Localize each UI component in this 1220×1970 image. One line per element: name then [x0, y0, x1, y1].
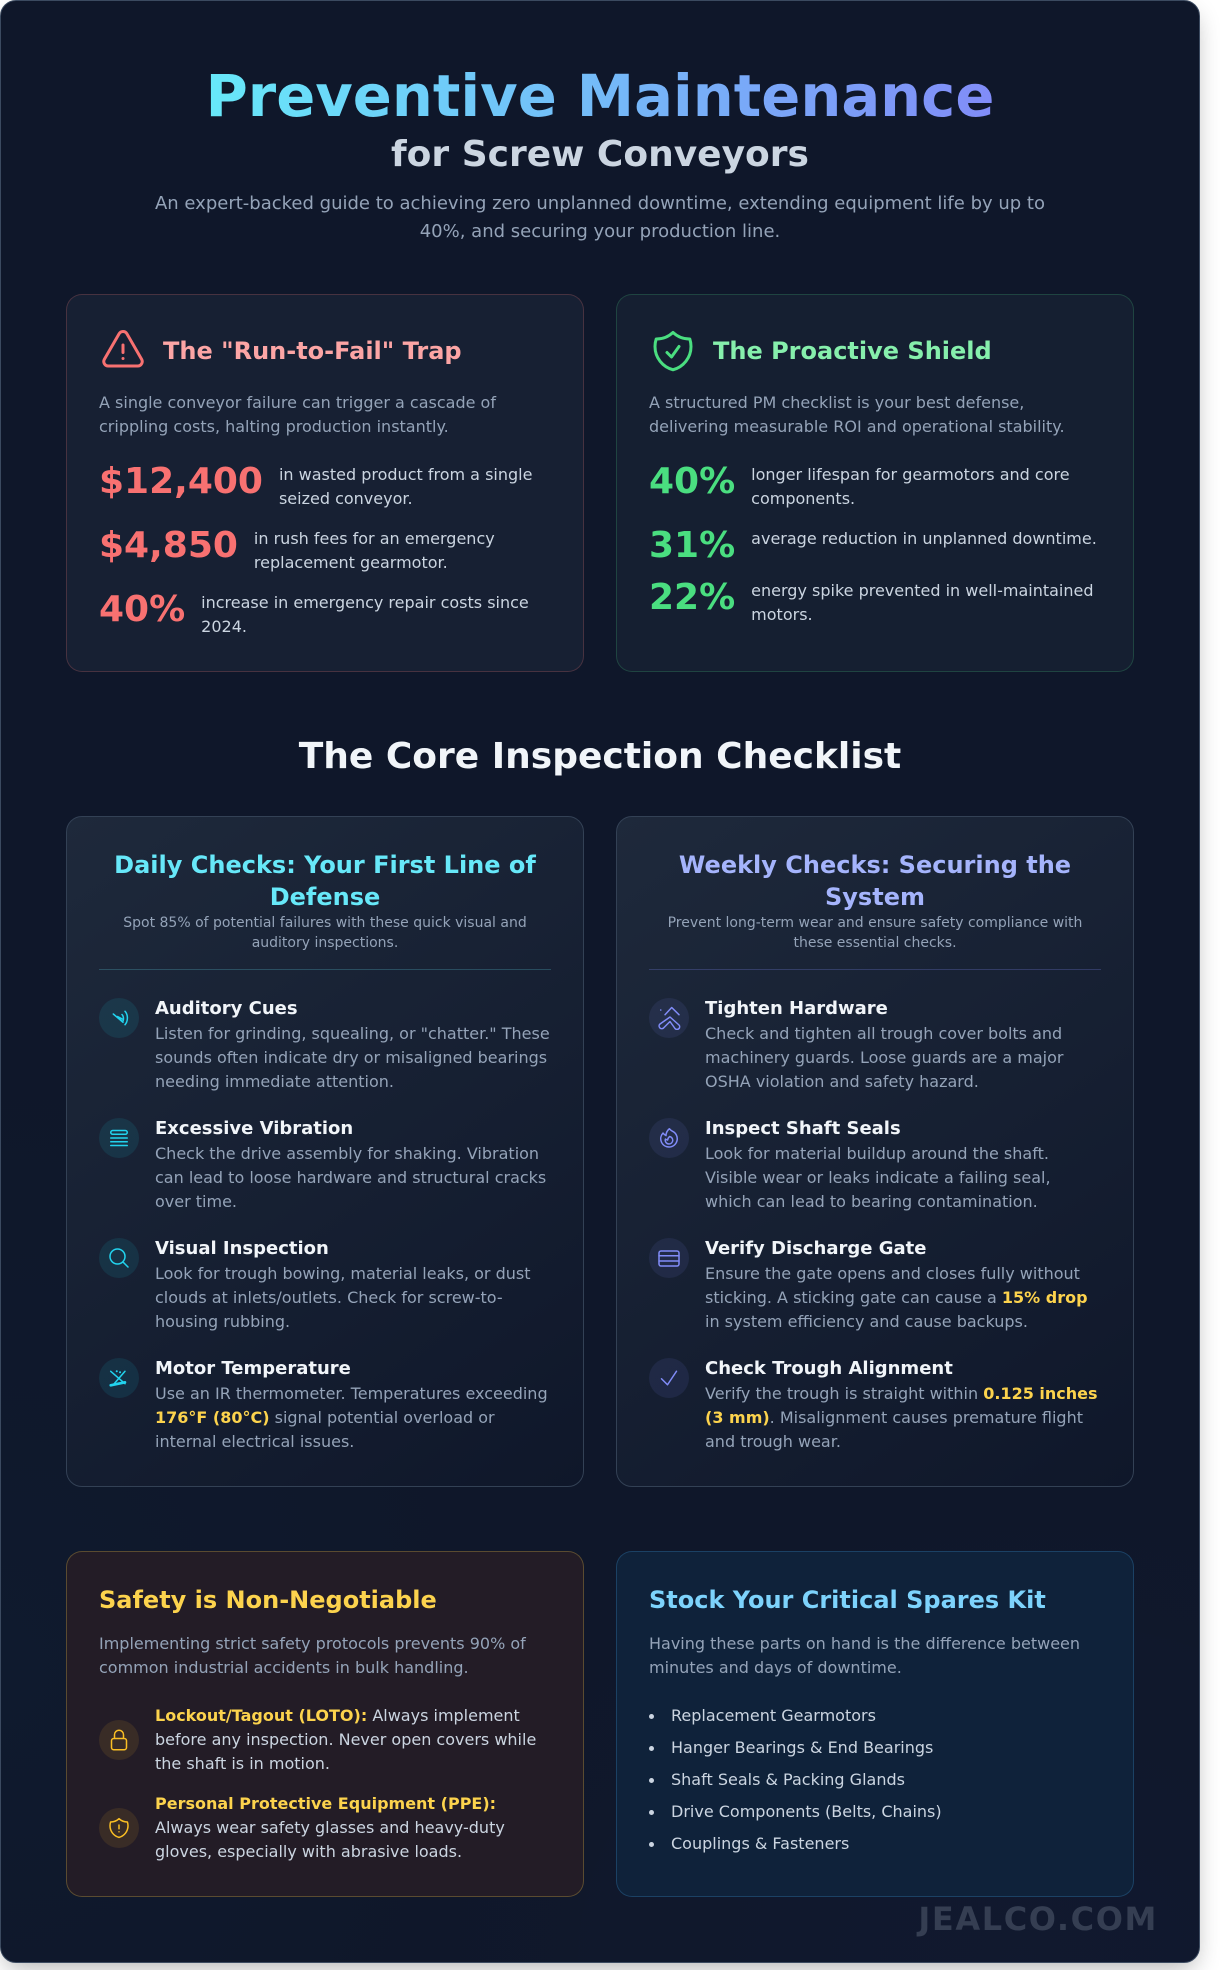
icon: wrench [649, 998, 689, 1038]
check: shaft seals [649, 1118, 1051, 1211]
daily header [99, 849, 551, 970]
check: shaft seals: Inspect Shaft Seals [705, 1118, 901, 1139]
spares list: Hanger Bearings & End Bearings [671, 1738, 933, 1757]
stat: energy: energy spike prevented in well-maintained motors. [751, 581, 1094, 624]
weekly header [649, 849, 1101, 970]
check: vibration [99, 1118, 546, 1211]
stat: downtime [649, 525, 1097, 566]
stat: downtime: 31% [649, 525, 735, 566]
check: motor temperature [99, 1358, 548, 1451]
stat: rush fees: $4,850 [99, 525, 238, 566]
stat: wasted product [99, 461, 532, 508]
icon: magnifier [99, 1238, 139, 1278]
heading: spares: Stock Your Critical Spares Kit [649, 1586, 1046, 1614]
text: spares intro: Having these parts on hand is the difference between minutes and days of downtime. [649, 1634, 1080, 1677]
icon: lock [99, 1720, 139, 1760]
heading: proactive shield: The Proactive Shield [713, 337, 992, 365]
stat: lifespan: longer lifespan for gearmotors and core components. [751, 465, 1070, 508]
icon: shield check [654, 330, 692, 372]
icon: tools [99, 1358, 139, 1398]
spares list [649, 1706, 942, 1853]
check: trough alignment: Verify the trough is straight within 0.125 inches (3 mm). Misalignment causes premature flight and trough wear. [705, 1384, 1098, 1451]
panel: safety [66, 1551, 584, 1897]
stat: lifespan [649, 461, 1070, 508]
check: vibration: Excessive Vibration [155, 1118, 353, 1139]
icon: shield alert [99, 1808, 139, 1848]
spares list: Drive Components (Belts, Chains) [671, 1802, 942, 1821]
text: run-to-fail intro: A single conveyor failure can trigger a cascade of crippling costs, halting production instantly. [99, 393, 496, 436]
check: visual inspection: Look for trough bowing, material leaks, or dust clouds at inlets/outlets. Check for screw-to-housing rubbing. [155, 1264, 530, 1331]
icon: queue list [99, 1118, 139, 1158]
section heading: The Core Inspection Checklist [299, 736, 901, 777]
panel: spares kit [616, 1551, 1134, 1897]
panel: proactive shield [616, 294, 1134, 672]
safety item: PPE: Personal Protective Equipment (PPE): Always wear safety glasses and heavy-duty gloves, especially with abrasive loads. [155, 1794, 505, 1861]
stat: rush fees: in rush fees for an emergency replacement gearmotor. [254, 529, 495, 572]
check: auditory cues: Listen for grinding, squealing, or "chatter." These sounds often indicate dry or misaligned bearings needing immediate attention. [155, 1024, 550, 1091]
heading: run-to-fail: The "Run-to-Fail" Trap [163, 337, 462, 365]
weekly header: Weekly Checks: Securing the System [679, 851, 1071, 911]
spares list: Couplings & Fasteners [671, 1834, 849, 1853]
daily header: Daily Checks: Your First Line of Defense [114, 851, 536, 911]
watermark: JEALCO.COM [918, 1900, 1158, 1938]
safety item: LOTO: Lockout/Tagout (LOTO): Always implement before any inspection. Never open covers while the shaft is in motion. [155, 1706, 536, 1773]
text: proactive intro: A structured PM checklist is your best defense, delivering measurable ROI and operational stability. [649, 393, 1065, 436]
stat: energy: 22% [649, 577, 735, 618]
check: discharge gate: Ensure the gate opens and closes fully without sticking. A sticking gate can cause a 15% drop in system efficiency and cause backups. [705, 1264, 1088, 1331]
subtitle: for Screw Conveyors [391, 134, 809, 175]
check: visual inspection: Visual Inspection [155, 1238, 329, 1259]
panel: run-to-fail trap [66, 294, 584, 672]
check: motor temperature: Motor Temperature [155, 1358, 351, 1379]
check: discharge gate: Verify Discharge Gate [705, 1238, 926, 1259]
check: trough alignment [649, 1358, 1098, 1451]
icon: flame [649, 1118, 689, 1158]
check: hardware [649, 998, 1064, 1091]
panel: daily checks [66, 816, 584, 1487]
intro text: An expert-backed guide to achieving zero unplanned downtime, extending equipment life by up to 40%, and securing your production line. [155, 193, 1045, 242]
stat: wasted product: $12,400 [99, 461, 263, 502]
check: auditory cues: Auditory Cues [155, 998, 298, 1019]
heading: run-to-fail [102, 330, 462, 368]
stat: repair costs: increase in emergency repair costs since 2024. [201, 593, 529, 636]
check: vibration: Check the drive assembly for shaking. Vibration can lead to loose hardware and structural cracks over time. [155, 1144, 546, 1211]
check: trough alignment: Check Trough Alignment [705, 1358, 953, 1379]
stat: repair costs: 40% [99, 589, 185, 630]
stat: wasted product: in wasted product from a single seized conveyor. [279, 465, 532, 508]
icon: warning triangle [102, 330, 144, 368]
check: auditory cues [99, 998, 550, 1091]
check: shaft seals: Look for material buildup around the shaft. Visible wear or leaks indicate a failing seal, which can lead to bearing contamination. [705, 1144, 1051, 1211]
icon: check mark [649, 1358, 689, 1398]
spares list: Shaft Seals & Packing Glands [671, 1770, 905, 1789]
text: safety intro: Implementing strict safety protocols prevents 90% of common industrial accidents in bulk handling. [99, 1634, 526, 1677]
stat: downtime: average reduction in unplanned downtime. [751, 529, 1097, 548]
check: motor temperature: Use an IR thermometer. Temperatures exceeding 176°F (80°C) signal potential overload or internal electrical issues. [155, 1384, 548, 1451]
stat: lifespan: 40% [649, 461, 735, 502]
heading: proactive shield [654, 330, 992, 372]
check: visual inspection [99, 1238, 530, 1331]
heading: safety: Safety is Non-Negotiable [99, 1586, 437, 1614]
check: hardware: Tighten Hardware [705, 998, 888, 1019]
icon: gate [649, 1238, 689, 1278]
stat: repair costs [99, 589, 529, 636]
spares list: Replacement Gearmotors [671, 1706, 876, 1725]
weekly header: Prevent long-term wear and ensure safety compliance with these essential checks. [668, 915, 1082, 951]
check: hardware: Check and tighten all trough cover bolts and machinery guards. Loose guards are a major OSHA violation and safety hazard. [705, 1024, 1063, 1091]
panel: weekly checks [616, 816, 1134, 1487]
daily header: Spot 85% of potential failures with these quick visual and auditory inspections. [123, 915, 527, 951]
stat: rush fees [99, 525, 495, 572]
check: discharge gate [649, 1238, 1088, 1331]
icon: sound [99, 998, 139, 1038]
title: Preventive Maintenance [206, 63, 994, 130]
